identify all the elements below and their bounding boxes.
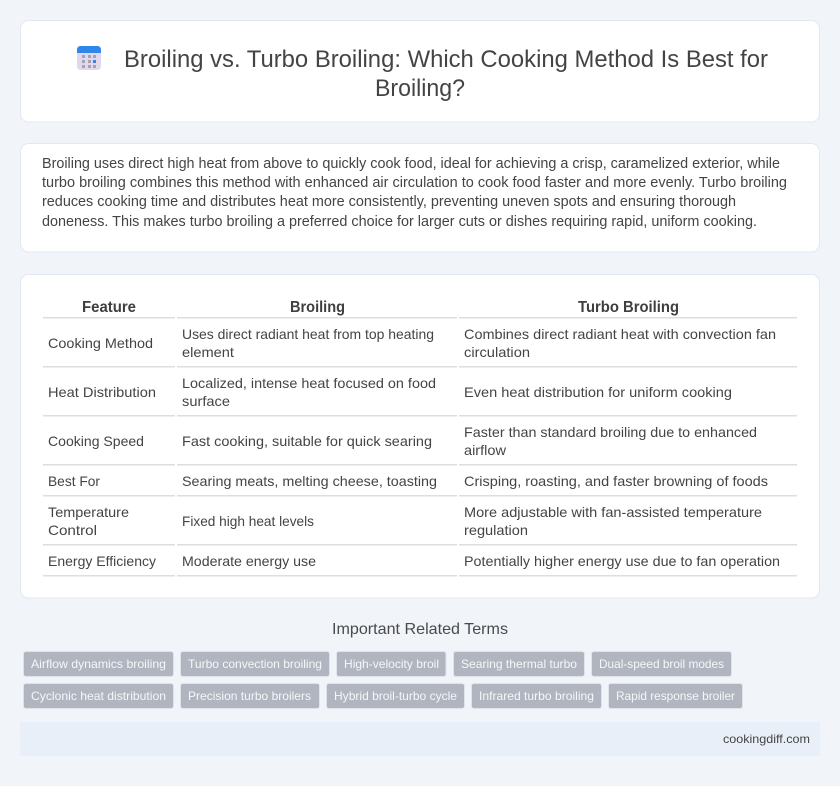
- row: temperature control: More adjustable with fan-assisted temperature: [464, 504, 762, 520]
- row: temperature control: regulation: [464, 522, 528, 538]
- related term tags: Hybrid broil-turbo cycle: [334, 689, 457, 703]
- row: temperature control: [48, 504, 762, 538]
- row: cooking method: Combines direct radiant heat with convection fan: [464, 326, 776, 342]
- related term tags: Searing thermal turbo: [461, 657, 577, 671]
- row: cooking method: [48, 326, 776, 360]
- row: cooking speed: Cooking Speed: [48, 433, 144, 449]
- panel: title card: [20, 20, 820, 122]
- text block: intro: reduces cooking time and distributes heat more consistently, preventing uneven spots and ensuring thorough: [42, 194, 736, 210]
- title: [124, 46, 768, 102]
- row: heat distribution: surface: [182, 393, 230, 409]
- row: cooking method: Uses direct radiant heat from top heating: [182, 326, 434, 342]
- row: cooking method: circulation: [464, 344, 530, 360]
- row: best for: Best For: [48, 473, 100, 489]
- row: best for: [48, 473, 768, 489]
- row: best for: Crisping, roasting, and faster browning of foods: [464, 473, 768, 489]
- row: energy efficiency: Moderate energy use: [182, 553, 316, 569]
- related term tags: Cyclonic heat distribution: [31, 689, 166, 703]
- heading: related terms: Important Related Terms: [332, 621, 508, 638]
- table header: Feature: [82, 299, 136, 316]
- related term tags: Rapid response broiler: [616, 689, 735, 703]
- footer: [20, 722, 820, 756]
- related term tags: High-velocity broil: [344, 657, 439, 671]
- panel: intro paragraph: [20, 144, 820, 252]
- text block: intro: doneness. This makes turbo broiling a preferred choice for larger cuts or dishes requiring rapid, uniform cooking.: [42, 214, 757, 230]
- row: best for: Searing meats, melting cheese, toasting: [182, 473, 437, 489]
- table header: Turbo Broiling: [578, 299, 679, 316]
- related term tags: Airflow dynamics broiling: [31, 657, 166, 671]
- row: cooking speed: [48, 424, 757, 458]
- text block: intro: turbo broiling combines this method with enhanced air circulation to cook food faster and more evenly. Turbo broiling: [42, 175, 787, 191]
- related term tags: [24, 652, 742, 708]
- icon: calendar: [77, 46, 101, 70]
- row: heat distribution: Heat Distribution: [48, 384, 156, 400]
- row: heat distribution: [48, 375, 732, 409]
- related term tags: Turbo convection broiling: [188, 657, 322, 671]
- title: Broiling vs. Turbo Broiling: Which Cooking Method Is Best for: [124, 46, 768, 73]
- row: cooking method: Cooking Method: [48, 335, 153, 351]
- row: temperature control: Temperature: [48, 504, 129, 520]
- row: cooking speed: Fast cooking, suitable for quick searing: [182, 433, 432, 449]
- row: energy efficiency: Potentially higher energy use due to fan operation: [464, 553, 780, 569]
- text block: intro: [42, 156, 787, 230]
- related term tags: Infrared turbo broiling: [479, 689, 594, 703]
- row: cooking speed: Faster than standard broiling due to enhanced: [464, 424, 757, 440]
- related term tags: Precision turbo broilers: [188, 689, 311, 703]
- related term tags: Dual-speed broil modes: [599, 657, 724, 671]
- row: temperature control: Fixed high heat levels: [182, 513, 314, 529]
- table header: Broiling: [290, 299, 345, 316]
- row: energy efficiency: Energy Efficiency: [48, 553, 156, 569]
- title: Broiling?: [375, 75, 465, 102]
- footer: cookingdiff.com: [723, 732, 810, 746]
- row: cooking method: element: [182, 344, 234, 360]
- row: temperature control: Control: [48, 522, 97, 538]
- text block: intro: Broiling uses direct high heat from above to quickly cook food, ideal for achieving a crisp, caramelized exterior, while: [42, 156, 780, 172]
- row: cooking speed: airflow: [464, 442, 507, 458]
- row: heat distribution: Localized, intense heat focused on food: [182, 375, 436, 391]
- table header: [82, 299, 679, 316]
- panel: comparison table: [20, 274, 820, 598]
- row: heat distribution: Even heat distribution for uniform cooking: [464, 384, 732, 400]
- row: energy efficiency: [48, 553, 780, 569]
